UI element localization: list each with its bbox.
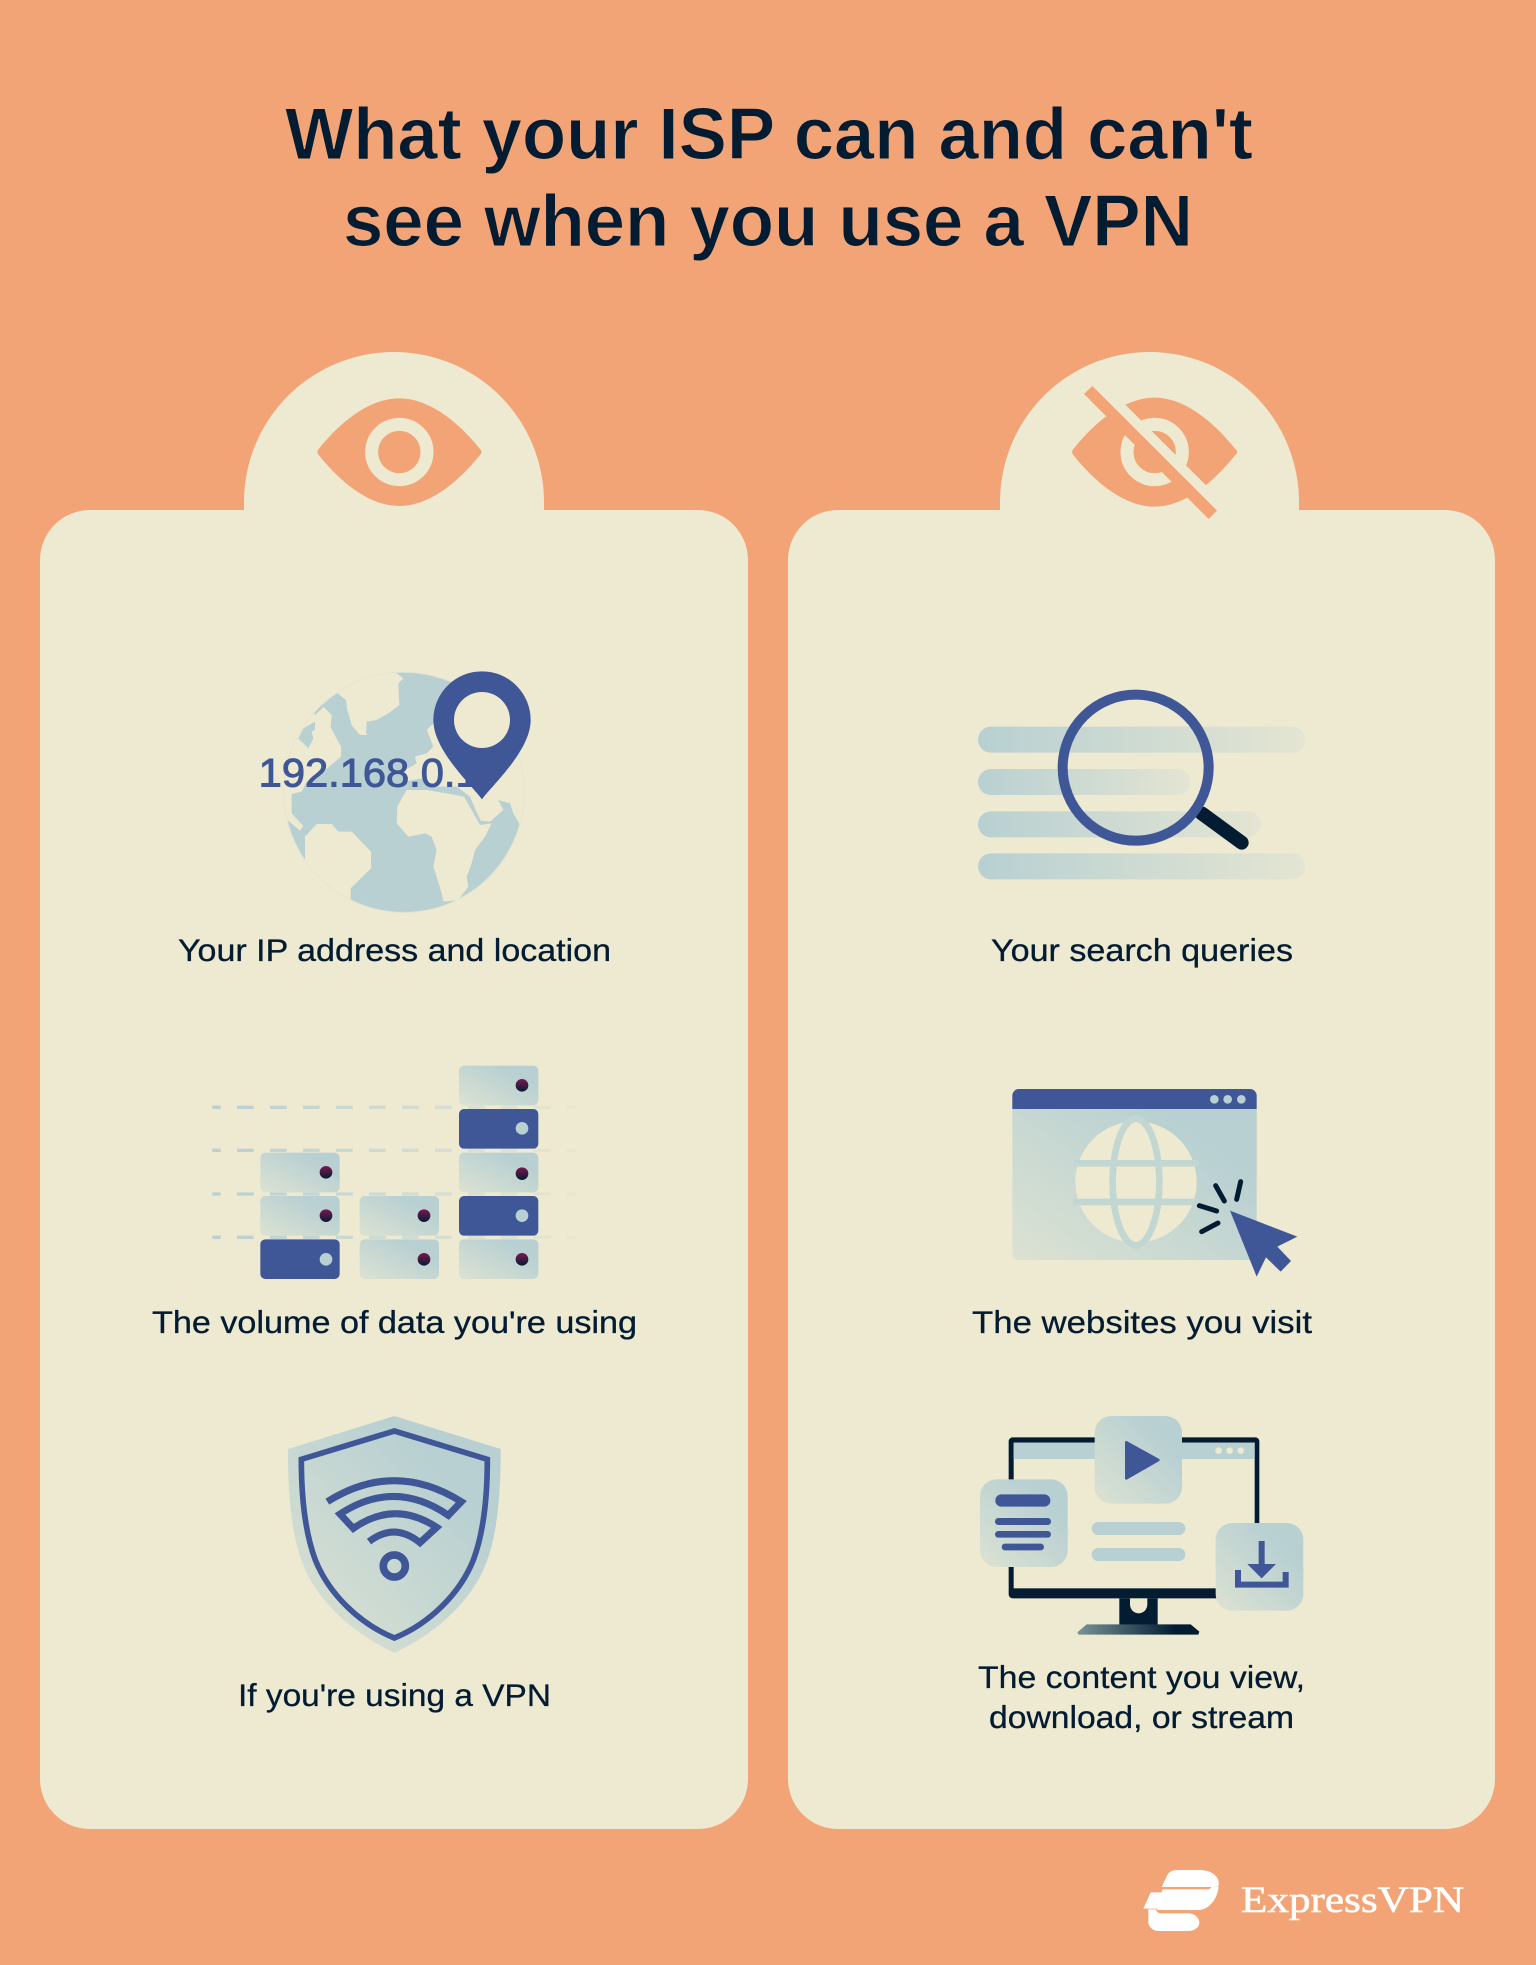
IP address text: 192.168.0.1: [259, 752, 479, 796]
label: content you view, download, or stream: [978, 1659, 1305, 1735]
icon: crossed-out eye: [1072, 386, 1237, 519]
logo wordmark: ExpressVPN: [1241, 1880, 1464, 1921]
panel: what the ISP can't see: [788, 352, 1495, 1829]
label: volume of data: The volume of data you're using: [152, 1304, 637, 1340]
panel: what the ISP can see: [40, 352, 748, 1829]
icon: magnifying glass over search text lines: [978, 695, 1305, 879]
logo: ExpressVPN: [1143, 1870, 1464, 1931]
title: [285, 94, 1253, 262]
panel background: right card with dome: [788, 352, 1495, 1829]
icon: server stacks showing data volume: [212, 1066, 577, 1279]
icon: open eye: [317, 398, 482, 506]
title: What your ISP can and can't: [285, 94, 1253, 175]
title: see when you use a VPN: [343, 181, 1193, 262]
label: websites you visit: The websites you visit: [972, 1304, 1312, 1340]
icon: browser window with globe and cursor: [1012, 1089, 1297, 1277]
label: using a VPN: If you're using a VPN: [238, 1677, 551, 1713]
icon: shield with wifi symbol: [288, 1416, 501, 1653]
label: IP address and location: Your IP address and location: [178, 932, 611, 968]
label: search queries: Your search queries: [991, 932, 1293, 968]
label: content you view, download, or stream: The content you view,: [978, 1659, 1305, 1695]
label: content you view, download, or stream: download, or stream: [989, 1699, 1294, 1735]
location pin: [433, 671, 531, 799]
panel background: left card with dome: [40, 352, 748, 1829]
icon: globe with IP address and location pin: [259, 660, 540, 917]
icon: monitor with media tiles: [980, 1416, 1303, 1635]
logo mark: [1143, 1870, 1219, 1931]
